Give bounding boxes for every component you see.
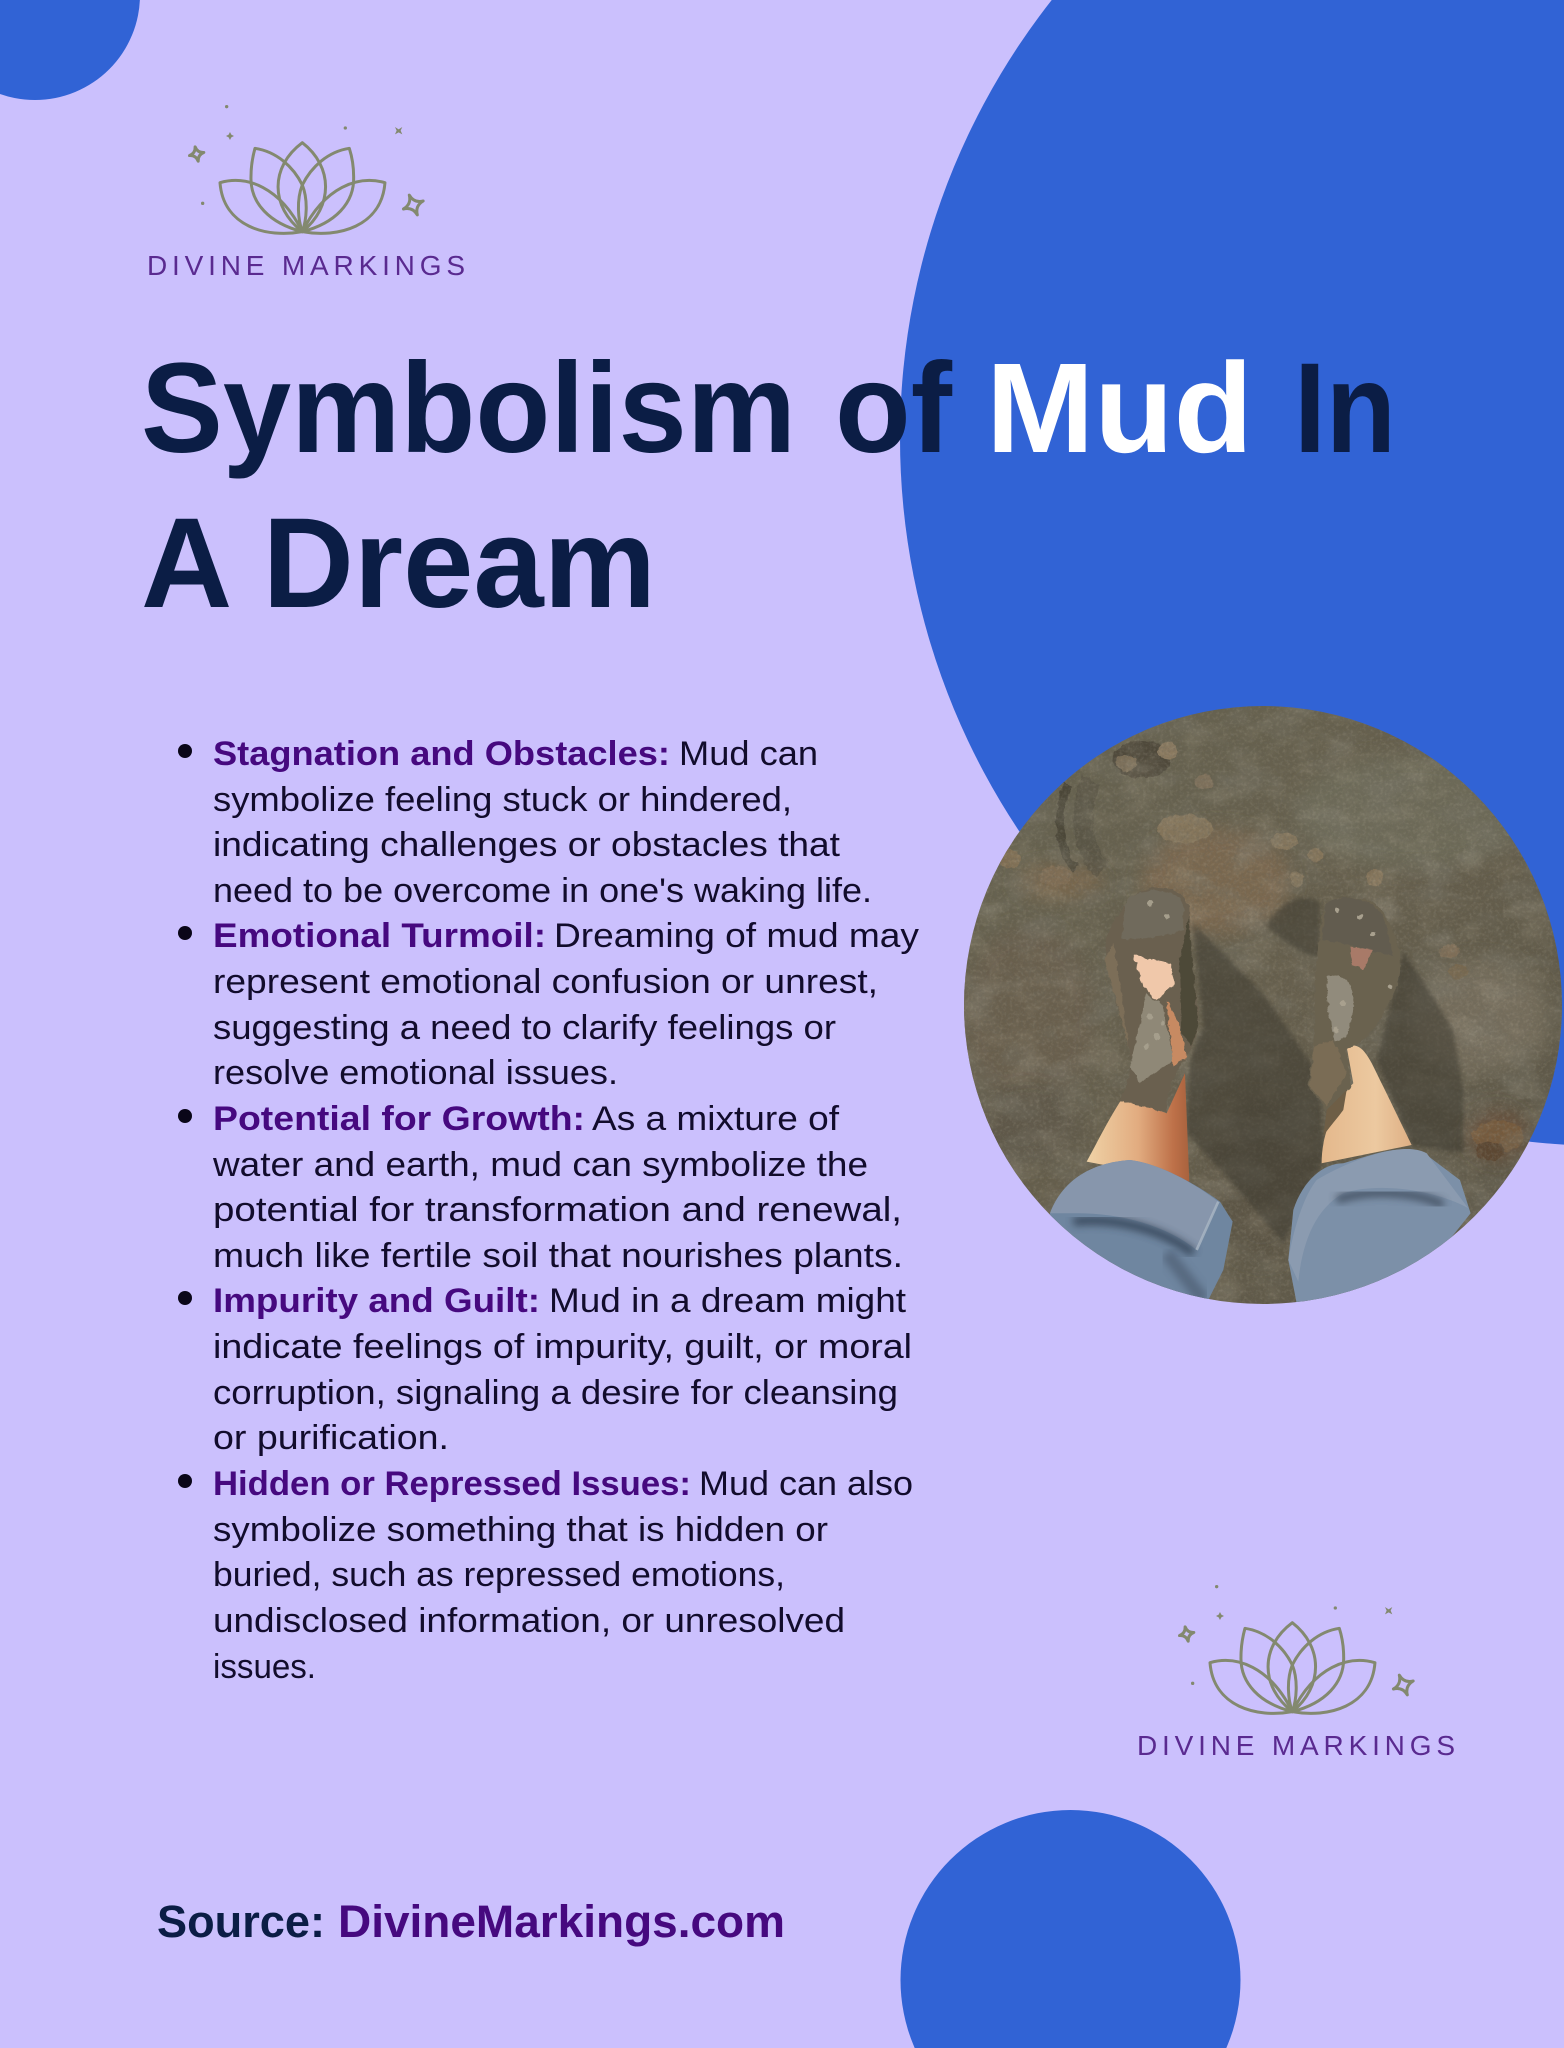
list item: Impurity and Guilt xyxy=(178,1282,912,1457)
right jeans xyxy=(1288,1150,1471,1303)
list item: Potential for Growth xyxy=(178,1100,903,1275)
list item: Hidden or Repressed Issues: undisclosed information, or unresolved xyxy=(213,1602,845,1640)
list item: Hidden or Repressed Issues: Mud can also xyxy=(699,1465,913,1503)
list item: Stagnation and Obstacles: symbolize feeling stuck or hindered, xyxy=(213,781,792,819)
list item: Hidden or Repressed Issues xyxy=(178,1465,913,1686)
decorative circle: bottom xyxy=(900,1810,1240,2048)
list item: Emotional Turmoil: Dreaming of mud may xyxy=(554,917,919,955)
title: Symbolism xyxy=(141,337,796,480)
list item: Emotional Turmoil: resolve emotional issues. xyxy=(213,1054,618,1092)
ground texture xyxy=(960,700,1564,1310)
foot shadows xyxy=(1187,898,1463,1243)
list item: Potential for Growth: As a mixture of xyxy=(592,1100,840,1138)
decorative circle: large blue top right xyxy=(900,0,1564,1146)
list item: Impurity and Guilt: corruption, signaling a desire for cleansing xyxy=(213,1374,898,1412)
title: Mud xyxy=(986,337,1253,480)
source line: DivineMarkings.com xyxy=(338,1896,785,1947)
list item: Impurity and Guilt: Impurity and Guilt: xyxy=(213,1282,540,1320)
list item: Emotional Turmoil xyxy=(178,917,919,1092)
left jeans xyxy=(1050,1160,1233,1303)
list item: Potential for Growth: water and earth, mud can symbolize the xyxy=(212,1146,868,1184)
list item: Stagnation and Obstacles xyxy=(178,735,872,910)
title: A Dream xyxy=(141,492,656,635)
list item: Impurity and Guilt: or purification. xyxy=(213,1419,449,1457)
list item: Hidden or Repressed Issues: issues. xyxy=(213,1648,316,1686)
mud on left foot xyxy=(1105,887,1198,1113)
list item: Stagnation and Obstacles: need to be overcome in one's waking life. xyxy=(213,872,872,910)
bullet list xyxy=(178,735,919,1686)
list item: Hidden or Repressed Issues: Hidden or Repressed Issues: xyxy=(213,1465,691,1503)
list item: Stagnation and Obstacles: indicating challenges or obstacles that xyxy=(213,826,841,864)
photo: muddy feet in circle xyxy=(960,700,1564,1310)
smear on right leg xyxy=(1323,1090,1347,1137)
icon: lotus with stars xyxy=(1178,1585,1417,1713)
right leg xyxy=(1322,1045,1412,1163)
title xyxy=(141,337,1396,635)
logo: top left xyxy=(147,105,465,281)
list item: Hidden or Repressed Issues: symbolize something that is hidden or xyxy=(213,1511,828,1549)
list item: Impurity and Guilt: Mud in a dream might xyxy=(549,1282,907,1320)
list item: Potential for Growth: much like fertile soil that nourishes plants. xyxy=(213,1237,903,1275)
list item: Impurity and Guilt: indicate feelings of impurity, guilt, or moral xyxy=(213,1328,912,1366)
list item: Emotional Turmoil: suggesting a need to clarify feelings or xyxy=(213,1009,836,1047)
list item: Potential for Growth: Potential for Growth: xyxy=(213,1100,585,1138)
logo wordmark: DIVINE MARKINGS xyxy=(1137,1730,1455,1761)
icon: lotus with stars xyxy=(188,105,427,233)
list item: Hidden or Repressed Issues: buried, such as repressed emotions, xyxy=(213,1556,785,1594)
left leg xyxy=(1087,1073,1189,1182)
title: of xyxy=(835,337,952,480)
list item: Potential for Growth: potential for transformation and renewal, xyxy=(213,1191,902,1229)
logo wordmark: DIVINE MARKINGS xyxy=(147,250,465,281)
mud on right foot xyxy=(1308,898,1401,1110)
source line: Source: xyxy=(157,1896,325,1947)
list item: Emotional Turmoil: represent emotional confusion or unrest, xyxy=(213,963,878,1001)
list item: Stagnation and Obstacles: Stagnation and Obstacles: xyxy=(213,735,670,773)
ground tones xyxy=(964,740,1549,1166)
logo: bottom right xyxy=(1137,1585,1455,1761)
title: In xyxy=(1294,337,1396,480)
list item: Emotional Turmoil: Emotional Turmoil: xyxy=(213,917,546,955)
list item: Stagnation and Obstacles: Mud can xyxy=(679,735,818,773)
decorative circle: top left xyxy=(0,0,140,100)
source line xyxy=(157,1896,785,1947)
